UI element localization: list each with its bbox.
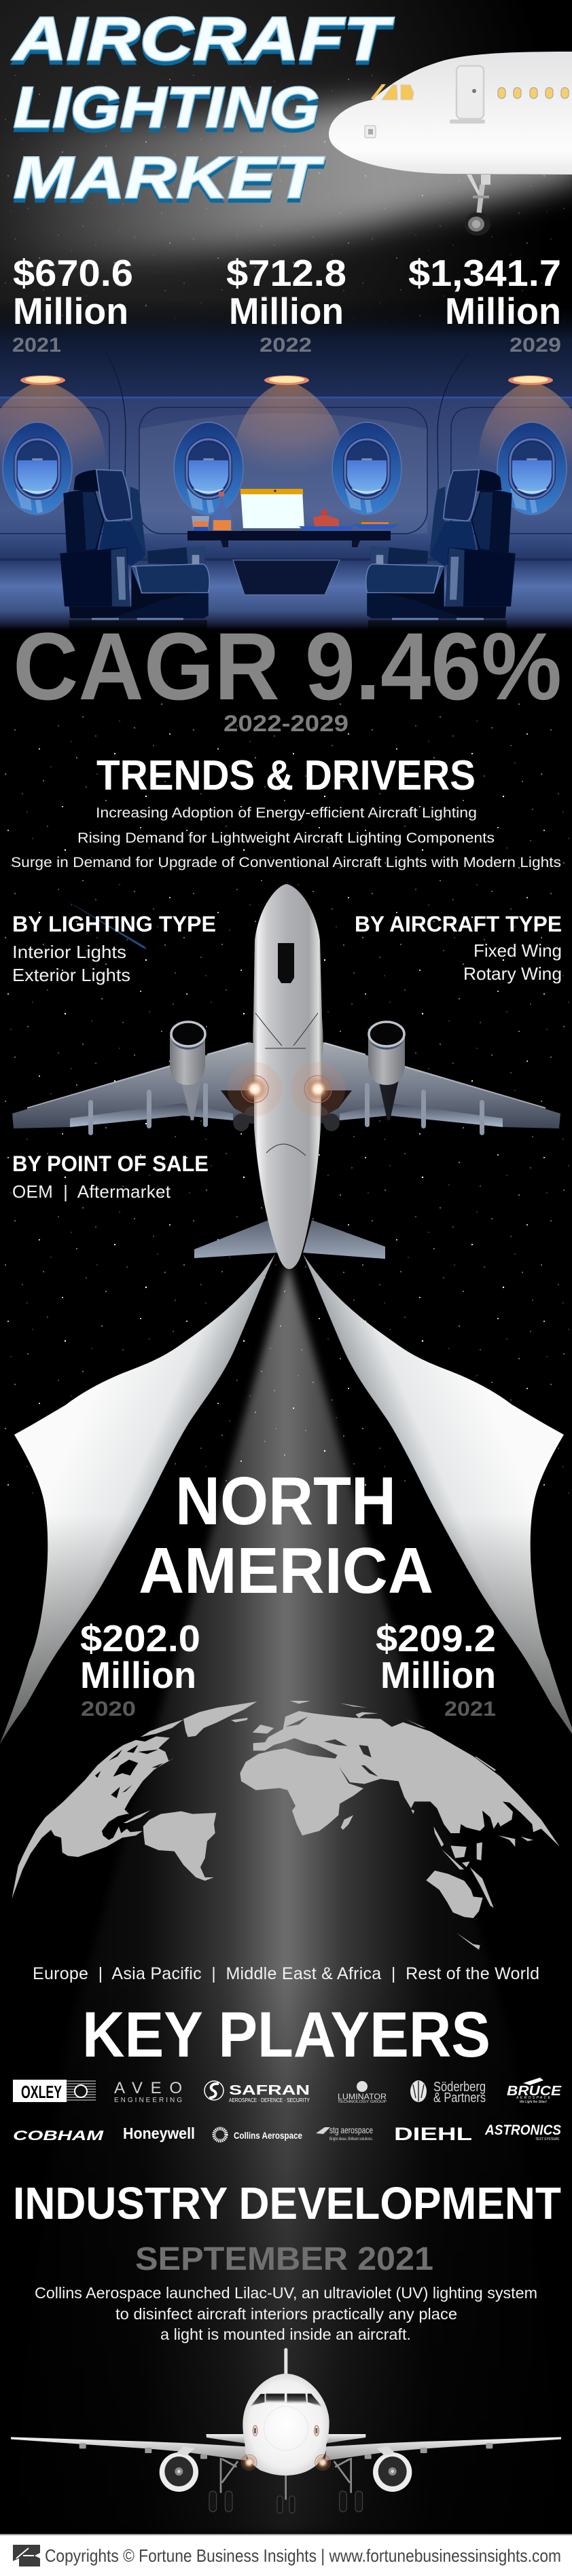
madagascar <box>341 1815 353 1830</box>
panel: trends and drivers <box>11 752 561 870</box>
uk <box>253 1725 274 1733</box>
stabilizers <box>194 1220 385 1259</box>
logo: Diehl: DIEHL <box>394 2124 472 2144</box>
text block: development description <box>35 2284 537 2343</box>
heading: key players: KEY PLAYERS <box>82 1999 490 2071</box>
stat: 2022 market value: $712.8 <box>226 252 346 294</box>
light cones <box>0 380 572 474</box>
segment: by point of sale: OEM | Aftermarket <box>12 1181 171 1202</box>
greenland <box>183 1701 257 1737</box>
logo: Aveo Engineering: ENGINEERING <box>114 2097 182 2104</box>
stat: 2021 market value: 2021 <box>12 334 61 356</box>
stat: 2029 market value: 2029 <box>510 334 561 356</box>
wing pods <box>79 2443 493 2459</box>
panel: cabin interior illustration <box>0 299 572 633</box>
logo: Collins Aerospace <box>214 2129 302 2141</box>
landing lights <box>228 1062 345 1116</box>
logo: STG Aerospace <box>316 2124 373 2141</box>
right seat <box>366 470 516 633</box>
engines <box>170 1022 405 1120</box>
light curtain: left <box>0 1254 275 1744</box>
table with laptop, drinks and food <box>187 489 401 547</box>
segment: by lighting type: Exterior Lights <box>12 965 130 985</box>
segment: by point of sale: BY POINT OF SALE <box>12 1152 209 1176</box>
title: Aircraft Lighting Market: MARKET <box>14 149 325 215</box>
stabilizers <box>206 2434 365 2444</box>
regions list: Europe | Asia Pacific | Middle East & Africa | Rest of the World <box>33 1964 539 1983</box>
stat: CAGR: 2022-2029 <box>224 711 348 737</box>
left seat <box>60 470 209 633</box>
panel: trends and drivers: TRENDS & DRIVERS <box>96 752 476 799</box>
logo: Oxley <box>13 2080 96 2102</box>
stat: north america 2020: Million <box>80 1654 196 1696</box>
stat: 2022 market value: Million <box>229 290 344 332</box>
logo: Soderberg and Partners: Söderberg <box>433 2080 486 2095</box>
logo: STG Aerospace: stg aerospace <box>329 2124 373 2135</box>
eurasia <box>253 1711 560 1847</box>
segment: by aircraft type <box>355 912 562 984</box>
footer bar <box>0 2534 572 2576</box>
ceiling lights <box>20 375 553 385</box>
stat: north america 2020 <box>80 1617 200 1721</box>
stat: 2029 market value: $1,341.7 <box>408 252 561 294</box>
panel: trends and drivers: Increasing Adoption of Energy-efficient Aircraft Lighting <box>96 805 477 821</box>
africa <box>240 1748 363 1835</box>
light curtain: right <box>303 1254 572 1744</box>
segment: by aircraft type: BY AIRCRAFT TYPE <box>355 912 562 936</box>
radome and side windows <box>264 2406 308 2450</box>
arctic russia islands <box>290 1701 496 1771</box>
logo: Bruce Aerospace: AEROSPACE <box>516 2096 551 2100</box>
engines <box>160 2452 412 2492</box>
title: Aircraft Lighting Market: AIRCRAFT <box>12 10 394 77</box>
iceland <box>231 1718 248 1723</box>
logo: Luminator: LUMINATOR <box>338 2092 387 2101</box>
stat: north america 2021: Million <box>380 1654 496 1696</box>
stat: 2021 market value: Million <box>13 290 128 332</box>
world map <box>12 1701 560 1950</box>
stat: 2021 market value: $670.6 <box>13 252 133 294</box>
flap fairings <box>88 1083 484 1135</box>
stat: 2029 market value <box>408 252 561 356</box>
panel: north america: AMERICA <box>139 1534 433 1607</box>
title: Aircraft Lighting Market: LIGHTING <box>14 75 319 139</box>
segment: by lighting type: BY LIGHTING TYPE <box>12 912 216 936</box>
stat: 2021 market value <box>12 252 133 356</box>
panel: north america: NORTH <box>175 1463 396 1539</box>
australia <box>426 1871 483 1918</box>
starfield <box>0 703 572 1494</box>
new zealand <box>457 1933 480 1950</box>
title: Aircraft Lighting Market: MARKET <box>14 145 325 210</box>
logo: Aveo Engineering: AVEO <box>114 2079 182 2097</box>
logo: Oxley: OXLEY <box>21 2082 62 2102</box>
segment: by lighting type: Interior Lights <box>12 942 126 962</box>
flaps <box>70 1103 503 1127</box>
illustration: airliner nose side view <box>329 52 572 236</box>
wings <box>12 1042 560 1128</box>
belly dots and bays <box>278 943 294 983</box>
text block: development description: to disinfect aircraft interiors practically any place <box>115 2305 457 2323</box>
wings <box>11 2437 561 2461</box>
shooting star <box>66 900 147 949</box>
fin <box>284 2348 287 2375</box>
logo: Bruce Aerospace: We Light the Skies! <box>520 2100 548 2104</box>
stat: north america 2021: $209.2 <box>376 1617 496 1659</box>
segment: by lighting type <box>12 912 216 985</box>
south america <box>143 1811 216 1881</box>
landing gear bays <box>221 1090 352 1120</box>
logo: Safran: AEROSPACE · DEFENCE · SECURITY <box>229 2097 310 2103</box>
logo: Soderberg and Partners: & Partners <box>433 2091 486 2105</box>
landing lights <box>241 2454 330 2470</box>
logo: Safran <box>204 2081 310 2103</box>
logo: Bruce Aerospace <box>507 2078 562 2104</box>
fuselage <box>243 2374 329 2476</box>
pylons <box>176 2446 395 2456</box>
stat: north america 2020: $202.0 <box>80 1617 200 1659</box>
logo: Soderberg and Partners <box>410 2080 486 2105</box>
logo: Honeywell: Honeywell <box>123 2124 195 2142</box>
stat: north america 2021: 2021 <box>444 1697 496 1721</box>
illustration: airliner front view <box>11 2348 561 2513</box>
fuselage <box>253 884 323 1269</box>
footer logo <box>13 2545 40 2566</box>
panel: trends and drivers: Rising Demand for Lightweight Aircraft Lighting Components <box>77 830 495 846</box>
table pedestal <box>233 560 340 595</box>
logo: STG Aerospace: Bright ideas. Brilliant solutions. <box>329 2137 373 2141</box>
logo: Safran: SAFRAN <box>229 2083 310 2098</box>
logo: Astronics: TEST SYSTEMS <box>535 2137 560 2141</box>
segment: by aircraft type: Fixed Wing <box>473 940 562 961</box>
stat: north america 2021 <box>376 1617 496 1721</box>
date: September 2021: SEPTEMBER 2021 <box>135 2241 433 2277</box>
arctic islands <box>85 1720 183 1780</box>
logo: Astronics: ASTRONICS <box>484 2122 561 2138</box>
segment: by aircraft type: Rotary Wing <box>463 963 562 984</box>
stat: north america 2020: 2020 <box>81 1697 136 1721</box>
title: Aircraft Lighting Market: AIRCRAFT <box>12 5 394 73</box>
southeast asia islands <box>411 1809 533 1908</box>
center light beam and lower glow <box>0 1263 572 2534</box>
logo: Bruce Aerospace: BRUCE <box>507 2084 562 2099</box>
north and central america <box>12 1736 175 1899</box>
windshield <box>249 2393 323 2407</box>
text block: development description: Collins Aerospace launched Lilac-UV, an ultraviolet (UV) lighting system <box>35 2284 537 2302</box>
segment: by point of sale <box>12 1152 209 1202</box>
stat: 2029 market value: Million <box>445 290 561 332</box>
logo: Collins Aerospace: Collins Aerospace <box>234 2130 302 2141</box>
title: Aircraft Lighting Market: LIGHTING <box>14 79 319 143</box>
logo: Luminator <box>338 2081 387 2104</box>
panel: header background with headlight beam <box>0 0 572 367</box>
landing gear <box>221 2458 351 2500</box>
text block: development description: a light is mounted inside an aircraft. <box>160 2325 411 2343</box>
gear wheels <box>233 1106 340 1131</box>
cabin windows <box>3 422 567 515</box>
panel: north america <box>139 1463 433 1607</box>
wing leading edge highlights <box>27 1043 546 1108</box>
stat: 2022 market value: 2022 <box>260 334 312 356</box>
panel: trends and drivers: Surge in Demand for Upgrade of Conventional Aircraft Lights with Modern Lights <box>11 854 561 870</box>
title: Aircraft Lighting Market <box>12 5 394 215</box>
stat: 2022 market value <box>226 252 346 356</box>
illustration: airliner top view with landing lights <box>12 884 560 1269</box>
caribbean islands <box>124 1810 151 1823</box>
logo: Cobham: COBHAM <box>13 2129 105 2143</box>
logo: Luminator: TECHNOLOGY GROUP <box>338 2100 387 2104</box>
